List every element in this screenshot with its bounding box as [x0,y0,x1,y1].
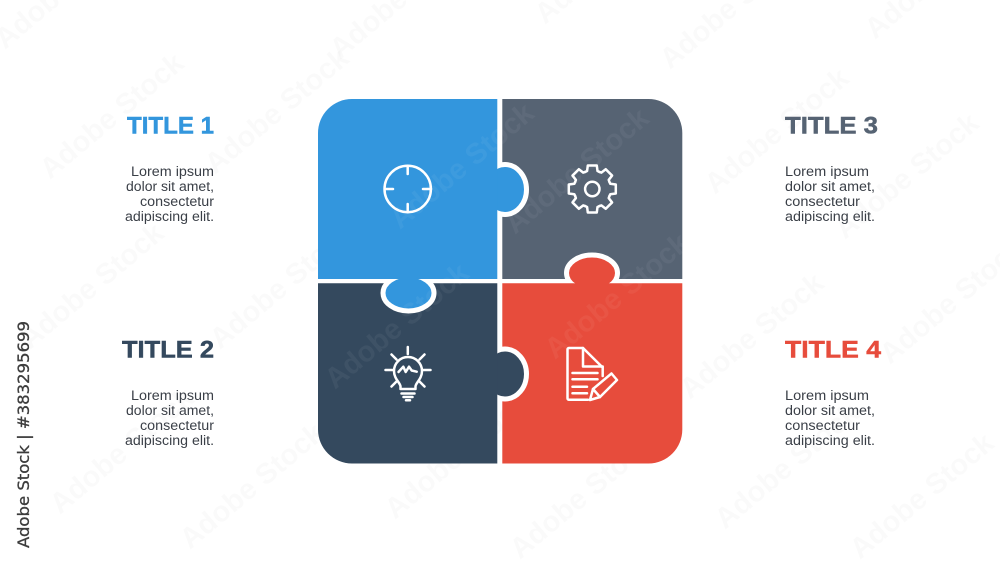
tab: blue piece into gray [484,164,526,214]
text block 3: dolor sit amet, [785,179,875,194]
title 1: TITLE 1 [127,112,214,140]
title 3: TITLE 3 [785,112,878,140]
watermarks on background: Adobe Stock [174,416,331,555]
watermarks over pieces: Adobe Stock [539,226,696,365]
text block 4: Lorem ipsum [785,388,869,403]
icon: document and pencil [568,348,617,400]
icon: gear [569,166,616,212]
watermarks on background: Adobe Stock [199,41,356,180]
watermarks on background: Adobe Stock [34,46,191,185]
watermarks on background: Adobe Stock [44,381,201,520]
icon: light bulb [386,347,430,400]
text block 1: consectetur [140,194,215,209]
title 4: TITLE 4 [785,336,881,364]
watermarks on background: Adobe Stock [204,216,361,355]
panel: blue piece top left [318,99,497,279]
text block 2: Lorem ipsum [131,388,214,403]
watermarks on background: Adobe Stock [379,386,536,525]
watermarks on background: Adobe Stock [504,426,661,563]
text block 2: adipiscing elit. [125,433,214,448]
watermarks on background: Adobe Stock [699,61,856,200]
text block 1: adipiscing elit. [125,209,214,224]
watermarks over pieces [319,96,696,395]
text block 1: dolor sit amet, [126,179,214,194]
text block 2 [125,388,215,448]
text block 4: consectetur [785,418,861,433]
text block 4 [785,388,875,448]
text block 3: consectetur [785,194,861,209]
icon: target [384,166,431,212]
panel: dark piece bottom left [318,283,497,464]
text block 2: consectetur [140,418,215,433]
tab: red piece into gray [566,255,618,291]
panel: gray piece top right [502,99,682,279]
watermarks over pieces: Adobe Stock [319,256,476,395]
watermarks on background: Adobe Stock [14,216,171,355]
text block 1: Lorem ipsum [131,164,214,179]
watermarks on background: Adobe Stock [844,426,1000,563]
text block 1 [125,164,215,224]
text block 3: adipiscing elit. [785,209,875,224]
text block 2: dolor sit amet, [126,403,214,418]
watermarks over pieces: Adobe Stock [499,101,656,240]
watermarks on background: Adobe Stock [674,266,831,405]
text block 4: dolor sit amet, [785,403,875,418]
text block 3 [785,164,875,224]
tab: dark piece into red [484,349,526,399]
title 2: TITLE 2 [122,336,214,364]
side credit text: Adobe Stock | #383295699 [14,321,33,548]
watermarks over pieces: Adobe Stock [384,96,541,235]
tab: blue piece into dark [383,275,434,311]
text block 4: adipiscing elit. [785,433,875,448]
puzzle: four interlocking pieces [318,99,682,464]
text block 3: Lorem ipsum [785,164,869,179]
watermarks on background: Adobe Stock [829,106,986,245]
panel: red piece bottom right [502,283,682,464]
watermarks on background: Adobe Stock [709,396,866,535]
